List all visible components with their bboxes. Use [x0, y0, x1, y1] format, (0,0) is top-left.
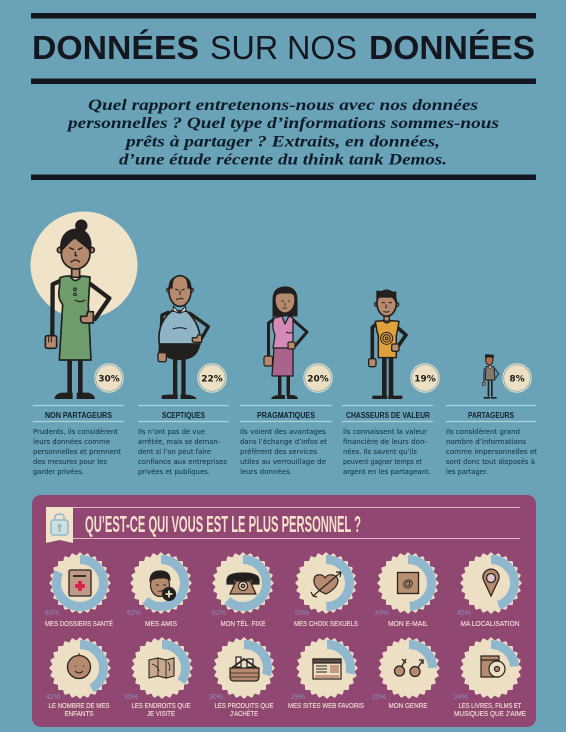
column: non partageurs [33, 411, 121, 476]
item: mes amis 62%: 62% [127, 610, 141, 617]
item: les endroits que je visite 35% [124, 637, 193, 718]
column: sceptiques [138, 411, 227, 476]
badge: 20%: 20% [307, 374, 329, 384]
item: les produits que j'achète 30%: LES PRODUITS QUE [214, 701, 274, 710]
column: non partageurs: garder privées. [33, 467, 84, 476]
column: partageurs: sont donc tout disposés à [446, 457, 535, 466]
item: mon genre 25% [372, 637, 440, 710]
column: pragmatiques: PRAGMATIQUES [257, 411, 316, 420]
item: les produits que j'achète 30%: J’ACHÈTE [230, 709, 258, 718]
column: non partageurs: leurs données comme [33, 437, 110, 446]
column: pragmatiques: leurs données. [240, 467, 292, 476]
item: mes sites web favoris 29%: 29% [291, 694, 305, 701]
item: le nombre de mes enfants 42%: ENFANTS [64, 709, 94, 718]
item: les livres, films et musiques 24%: 24% [454, 694, 468, 701]
column: partageurs: les partager. [446, 467, 488, 476]
item: les produits que j'achète 30%: 30% [209, 694, 223, 701]
item: ma localisation 45%: MA LOCALISATION [460, 619, 520, 628]
icon: medical file [69, 570, 91, 596]
item: mon e-mail 49%: MON E-MAIL [388, 619, 428, 628]
item: le nombre de mes enfants 42%: LE NOMBRE DE MES [48, 701, 110, 710]
item: les livres, films et musiques 24%: MUSIQUES QUE J’AIME [454, 709, 526, 718]
column: chasseurs de valeur [343, 411, 431, 476]
column: chasseurs de valeur: CHASSEURS DE VALEUR [346, 411, 430, 420]
top rule and title [31, 13, 536, 84]
title: SUR NOS [210, 30, 357, 67]
column: partageurs: nombre d’informations [446, 437, 526, 446]
column: partageurs: comme impersonnelles et [446, 447, 537, 456]
figure: non partageurs woman with halo [30, 212, 138, 399]
column: chasseurs de valeur: nées. Ils savent qu’ils [343, 447, 417, 456]
item: les produits que j'achète 30% [209, 637, 275, 718]
column: sceptiques: arrêtée, mais se deman- [138, 437, 220, 446]
column: partageurs: PARTAGEURS [468, 411, 515, 420]
icon: telephone [227, 573, 259, 594]
icon: heart and arrow [311, 572, 341, 597]
icon: gender symbols [394, 659, 423, 676]
column: partageurs [446, 411, 537, 476]
column: sceptiques: confiance aux entreprises [138, 457, 227, 466]
panel heading [46, 507, 520, 543]
item: mes choix sexuels 50%: 50% [295, 610, 309, 617]
item: mon e-mail 49% [375, 552, 439, 628]
title: DONNÉES [32, 29, 199, 67]
badge: 22%: 22% [201, 374, 223, 384]
figure: pragmatiques woman [264, 287, 307, 399]
item: mes sites web favoris 29% [288, 637, 364, 710]
badge: 19%: 19% [414, 374, 436, 384]
item: les endroits que je visite 35%: LES ENDROITS QUE [132, 701, 190, 710]
figure: partageurs small man [482, 354, 499, 399]
item: le nombre de mes enfants 42% [46, 637, 111, 718]
item: les livres, films et musiques 24%: LES LIVRES, FILMS ET [458, 701, 522, 710]
column: non partageurs: NON PARTAGEURS [45, 411, 113, 420]
item: mes amis 62%: MES AMIS [145, 619, 177, 628]
item: mes dossiers santé 83% [45, 552, 113, 628]
column: partageurs: Ils considèrent grand [446, 427, 520, 436]
item: mon tél. fixe 62% [212, 552, 274, 628]
icon: friend face with plus [150, 571, 176, 600]
segment header rules [33, 406, 536, 422]
column: sceptiques: Ils n’ont pas de vue [138, 427, 205, 436]
intro text: Quel rapport entretenons-nous avec nos données [88, 97, 478, 114]
badge: 22% [197, 363, 227, 393]
column: non partageurs: Prudents, ils considèrent [33, 427, 118, 436]
column: pragmatiques: utiles au verrouillage de [240, 457, 326, 466]
figure: chasseurs de valeur man [369, 290, 406, 399]
column: sceptiques: privées et publiques. [138, 467, 210, 476]
icon: map pin [483, 569, 499, 596]
badge: 8% [502, 363, 532, 393]
item: mes dossiers santé 83%: 83% [45, 610, 59, 617]
item: les endroits que je visite 35%: JE VISITE [147, 709, 175, 718]
title: DONNÉES [369, 29, 535, 67]
icon: lock ribbon [46, 507, 73, 543]
item: mes choix sexuels 50% [294, 552, 358, 628]
column: sceptiques: SCEPTIQUES [162, 411, 206, 420]
item: mes sites web favoris 29%: MES SITES WEB FAVORIS [288, 701, 364, 710]
column: non partageurs: personnelles et prennent [33, 447, 121, 456]
column: sceptiques: dent si l’on peut faire [138, 447, 211, 456]
intro text: prêts à partager ? Extraits, en données, [124, 134, 440, 150]
icon: case and disc [481, 656, 505, 677]
column: non partageurs: des mesures pour les [33, 457, 107, 466]
icon: at sign stamp: @ [403, 578, 414, 590]
icon: baby head [68, 653, 90, 678]
badge: 19% [410, 363, 440, 393]
icon: shopping basket [230, 657, 259, 681]
column: chasseurs de valeur: financière de leurs don- [343, 437, 427, 446]
icon: browser window [313, 659, 341, 679]
column: pragmatiques: Ils voient des avantages [240, 427, 326, 436]
item: mon e-mail 49%: 49% [375, 610, 389, 617]
item: mon genre 25%: MON GENRE [388, 701, 428, 710]
icon: folded map [149, 658, 174, 678]
item: mon genre 25%: 25% [372, 694, 386, 701]
item: mes dossiers santé 83%: MES DOSSIERS SANTÉ [45, 619, 113, 628]
item: ma localisation 45% [457, 552, 522, 628]
badge: 30% [94, 363, 124, 393]
column: pragmatiques: dans l’échange d’infos et [240, 437, 327, 446]
item: mon tél. fixe 62%: MON TÉL. FIXE [220, 619, 266, 628]
column: chasseurs de valeur: peuvent gagner temps et [343, 457, 422, 466]
item: mes choix sexuels 50%: MES CHOIX SEXUELS [294, 619, 358, 628]
column: pragmatiques: préfèrent des services [240, 447, 317, 456]
item: mon tél. fixe 62%: 62% [212, 610, 226, 617]
column: pragmatiques [240, 411, 327, 476]
item: ma localisation 45%: 45% [457, 610, 471, 617]
item: les livres, films et musiques 24% [454, 637, 526, 718]
intro text [66, 97, 499, 168]
intro text: d’une étude récente du think tank Demos. [119, 152, 447, 168]
badge: 8%: 8% [509, 374, 525, 384]
item: les endroits que je visite 35%: 35% [124, 694, 138, 701]
badge: 20% [303, 363, 333, 393]
panel: le plus personnel [32, 495, 536, 727]
intro text: personnelles ? Quel type d’informations sommes-nous [66, 115, 499, 132]
item: le nombre de mes enfants 42%: 42% [46, 694, 60, 701]
item: mes amis 62% [127, 552, 192, 628]
figure: sceptiques man [158, 276, 208, 399]
column: chasseurs de valeur: argent en les partageant. [343, 467, 431, 476]
badge: 30%: 30% [98, 374, 120, 384]
column: chasseurs de valeur: Ils connaissent la valeur [343, 427, 427, 436]
